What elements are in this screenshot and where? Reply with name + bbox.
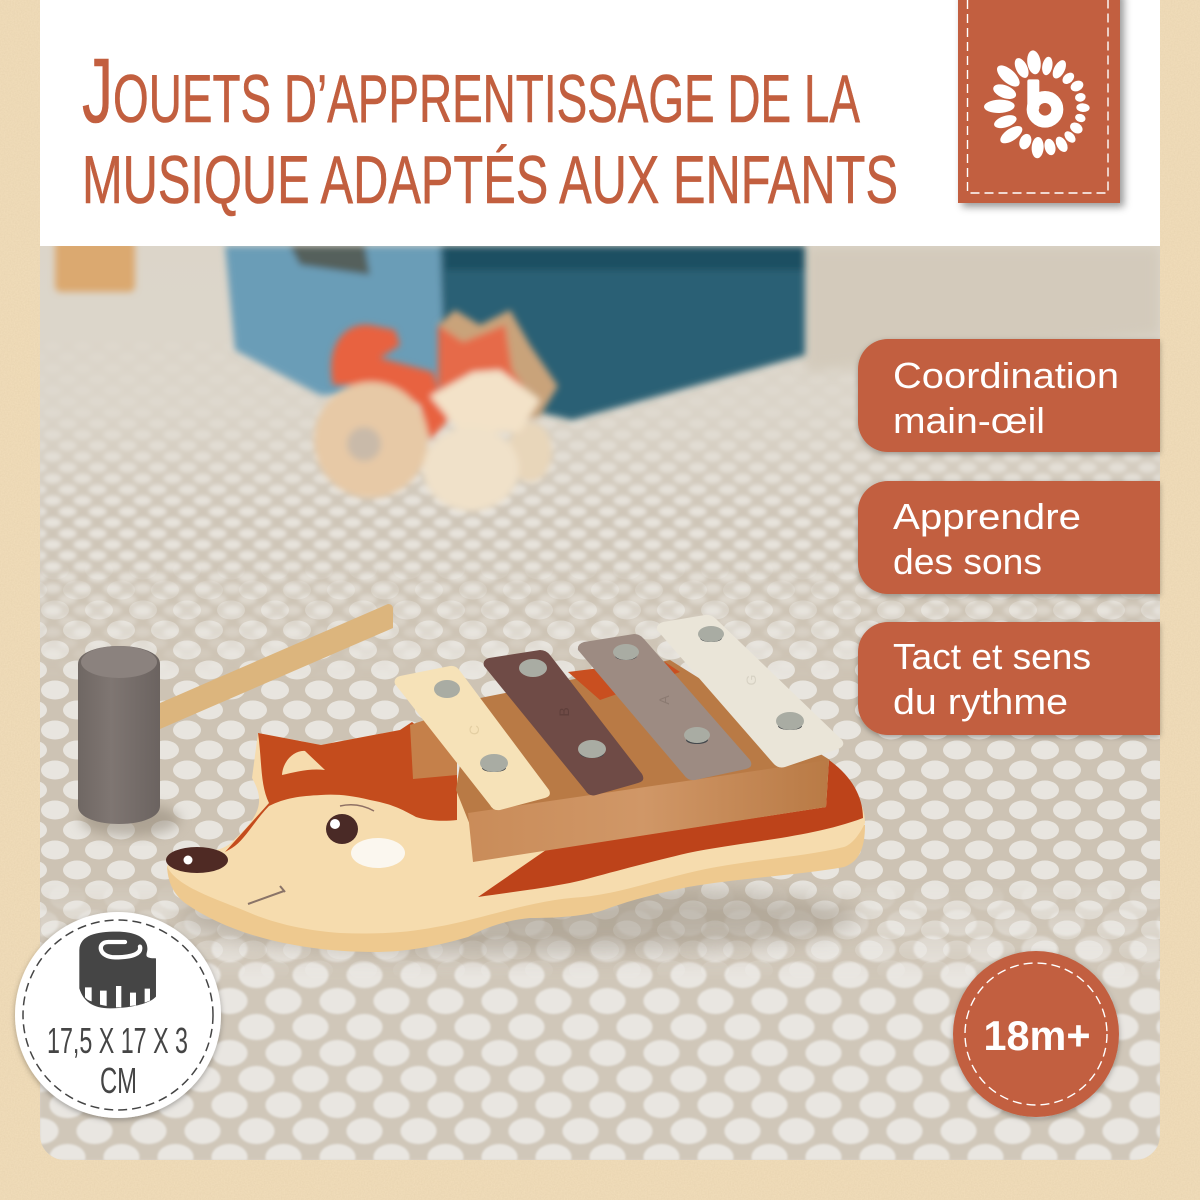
bar letters: B (556, 707, 572, 717)
base side (167, 824, 865, 952)
size badge (15, 912, 221, 1118)
fur body (478, 760, 863, 897)
top surface cream (167, 730, 865, 933)
tag body (958, 0, 1120, 203)
toy back wheel (508, 422, 552, 482)
bar letters: A (656, 695, 672, 705)
bar C (395, 666, 550, 810)
pill: coordination: Coordination (893, 355, 1119, 396)
brand tag (958, 0, 1120, 203)
bar letters: G (743, 675, 759, 685)
wood rear block (410, 715, 457, 779)
toy small wheel (423, 427, 519, 511)
icon: brand sun logo (984, 50, 1090, 159)
pill: coordination (858, 339, 1160, 452)
cheek (351, 838, 405, 868)
fox xylophone (166, 615, 865, 952)
bar A (578, 634, 751, 780)
mallet stick (160, 604, 393, 729)
wood front block (456, 760, 829, 862)
pill: rhythm: Tact et sens (893, 636, 1091, 677)
pill: sounds: des sons (893, 541, 1042, 582)
blurred blue crate (225, 246, 805, 420)
mallet head (78, 646, 160, 824)
mallet top (81, 646, 157, 678)
bar G (657, 615, 843, 768)
toy face (430, 370, 540, 432)
carpet (40, 246, 1160, 1160)
header band (40, 0, 1160, 246)
toy head back (438, 310, 558, 440)
stitching (968, 0, 1108, 193)
eye (326, 814, 358, 844)
dimensions (47, 1020, 188, 1101)
blurred wooden post (55, 240, 135, 292)
ear inner (282, 751, 325, 775)
eyebrow (340, 805, 374, 811)
age badge (953, 951, 1119, 1117)
bar letters (466, 675, 759, 735)
mallet shadow (80, 804, 180, 836)
blurred wooden fox toy (314, 310, 558, 511)
title line 2: MUSIQUE ADAPTÉS AUX ENFANTS (82, 142, 898, 218)
blurred background: floor (805, 246, 1160, 372)
age badge: 18m+ (984, 1012, 1090, 1059)
rivets (434, 626, 804, 772)
dimensions: 17,5 X 17 X 3 (47, 1020, 188, 1061)
icon: measuring tape (79, 932, 156, 1008)
pill: rhythm: du rythme (893, 681, 1068, 722)
pill: coordination: main-œil (893, 400, 1045, 441)
panel: photo of toy on carpet (40, 240, 1160, 1160)
toy big wheel (314, 382, 428, 498)
dimensions: CM (100, 1060, 137, 1101)
mallet (78, 604, 393, 824)
pill: rhythm (858, 622, 1160, 735)
benefit pills (858, 339, 1160, 735)
title line 1: JOUETS D’APPRENTISSAGE DE LA (82, 40, 860, 142)
mouth (248, 886, 285, 904)
nose (166, 847, 228, 873)
toy head fur (438, 325, 530, 396)
bar letters: C (466, 725, 482, 735)
title (82, 40, 898, 218)
orange fur glimpse (568, 662, 680, 700)
wood top recess (456, 660, 830, 825)
shadow under toy (180, 882, 860, 954)
bar B (484, 650, 643, 795)
pill: sounds: Apprendre (893, 496, 1081, 537)
pill: sounds (858, 481, 1160, 594)
toy body (331, 325, 448, 440)
fur head (225, 722, 457, 852)
